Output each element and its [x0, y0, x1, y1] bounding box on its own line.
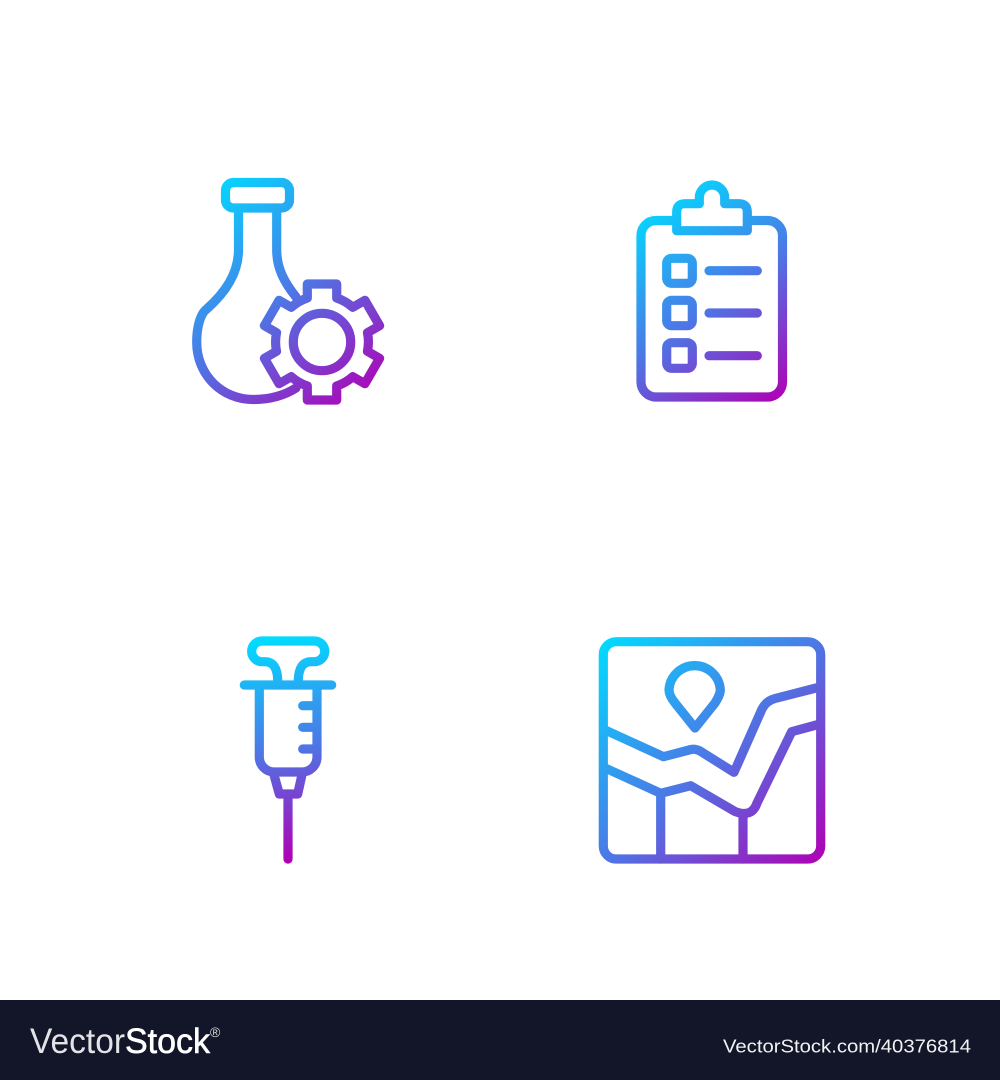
logo: VectorStock: Vector — [30, 1022, 125, 1061]
icon: clipboard checklist — [641, 185, 782, 397]
logo: VectorStock: Stock — [125, 1022, 210, 1061]
icon: map with location pin — [603, 642, 821, 859]
icon: flask with gear — [197, 182, 380, 400]
footer bar — [0, 1000, 1000, 1080]
image id url: VectorStock.com/40376814 — [723, 1036, 971, 1056]
logo: VectorStock: ® — [210, 1024, 221, 1040]
icon: syringe — [244, 641, 332, 859]
logo: VectorStock — [30, 1022, 221, 1061]
